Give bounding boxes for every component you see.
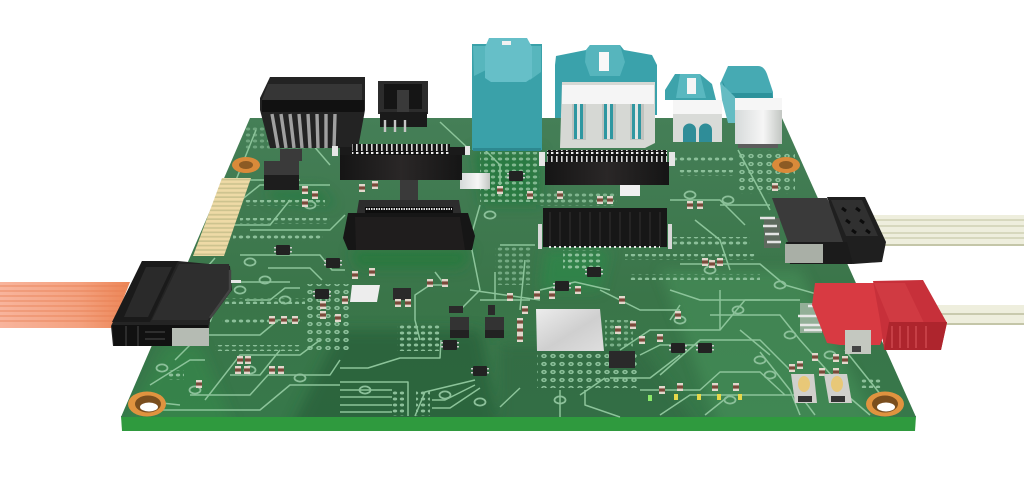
circuit board xyxy=(121,118,916,431)
cream cables upper right xyxy=(870,215,1024,246)
pad grids xyxy=(168,125,882,416)
vias xyxy=(156,191,836,406)
red cable connector xyxy=(798,280,947,354)
darker copper zones xyxy=(121,150,880,430)
black mezzanine connector top left xyxy=(332,144,470,180)
small silver chip xyxy=(350,285,380,302)
cream cables lower right xyxy=(935,305,1024,325)
black mezzanine connector top right xyxy=(539,150,675,185)
tactile button left xyxy=(791,374,817,403)
board top surface xyxy=(121,118,916,417)
small black header xyxy=(378,81,428,132)
silver QFN chip large xyxy=(536,309,604,351)
black right-angle header top left xyxy=(260,77,365,148)
copper traces xyxy=(135,122,885,417)
white shield right xyxy=(620,184,640,196)
indicator LEDs xyxy=(648,395,652,401)
black mezzanine connector middle right xyxy=(538,208,672,249)
tactile button right xyxy=(824,374,852,403)
board front edge xyxy=(121,416,916,431)
mounting hole top right xyxy=(772,157,800,173)
mounting hole bottom left xyxy=(128,392,166,416)
black mezzanine connector middle left xyxy=(343,200,475,250)
teal large connector housing xyxy=(555,45,657,148)
infographic: circuit board render xyxy=(0,38,1024,431)
mounting hole bottom right xyxy=(866,392,904,416)
teal cube connector xyxy=(720,66,782,148)
gold edge fingers xyxy=(193,178,251,256)
orange ribbon cable xyxy=(0,282,130,328)
black cable connector right xyxy=(760,197,886,264)
small ICs and passives xyxy=(196,149,848,401)
mounting hole top left xyxy=(232,157,260,173)
teal tall connector xyxy=(472,38,542,151)
teal small connector xyxy=(665,74,722,142)
white shield left xyxy=(460,173,490,189)
black cable connector left xyxy=(111,261,241,346)
